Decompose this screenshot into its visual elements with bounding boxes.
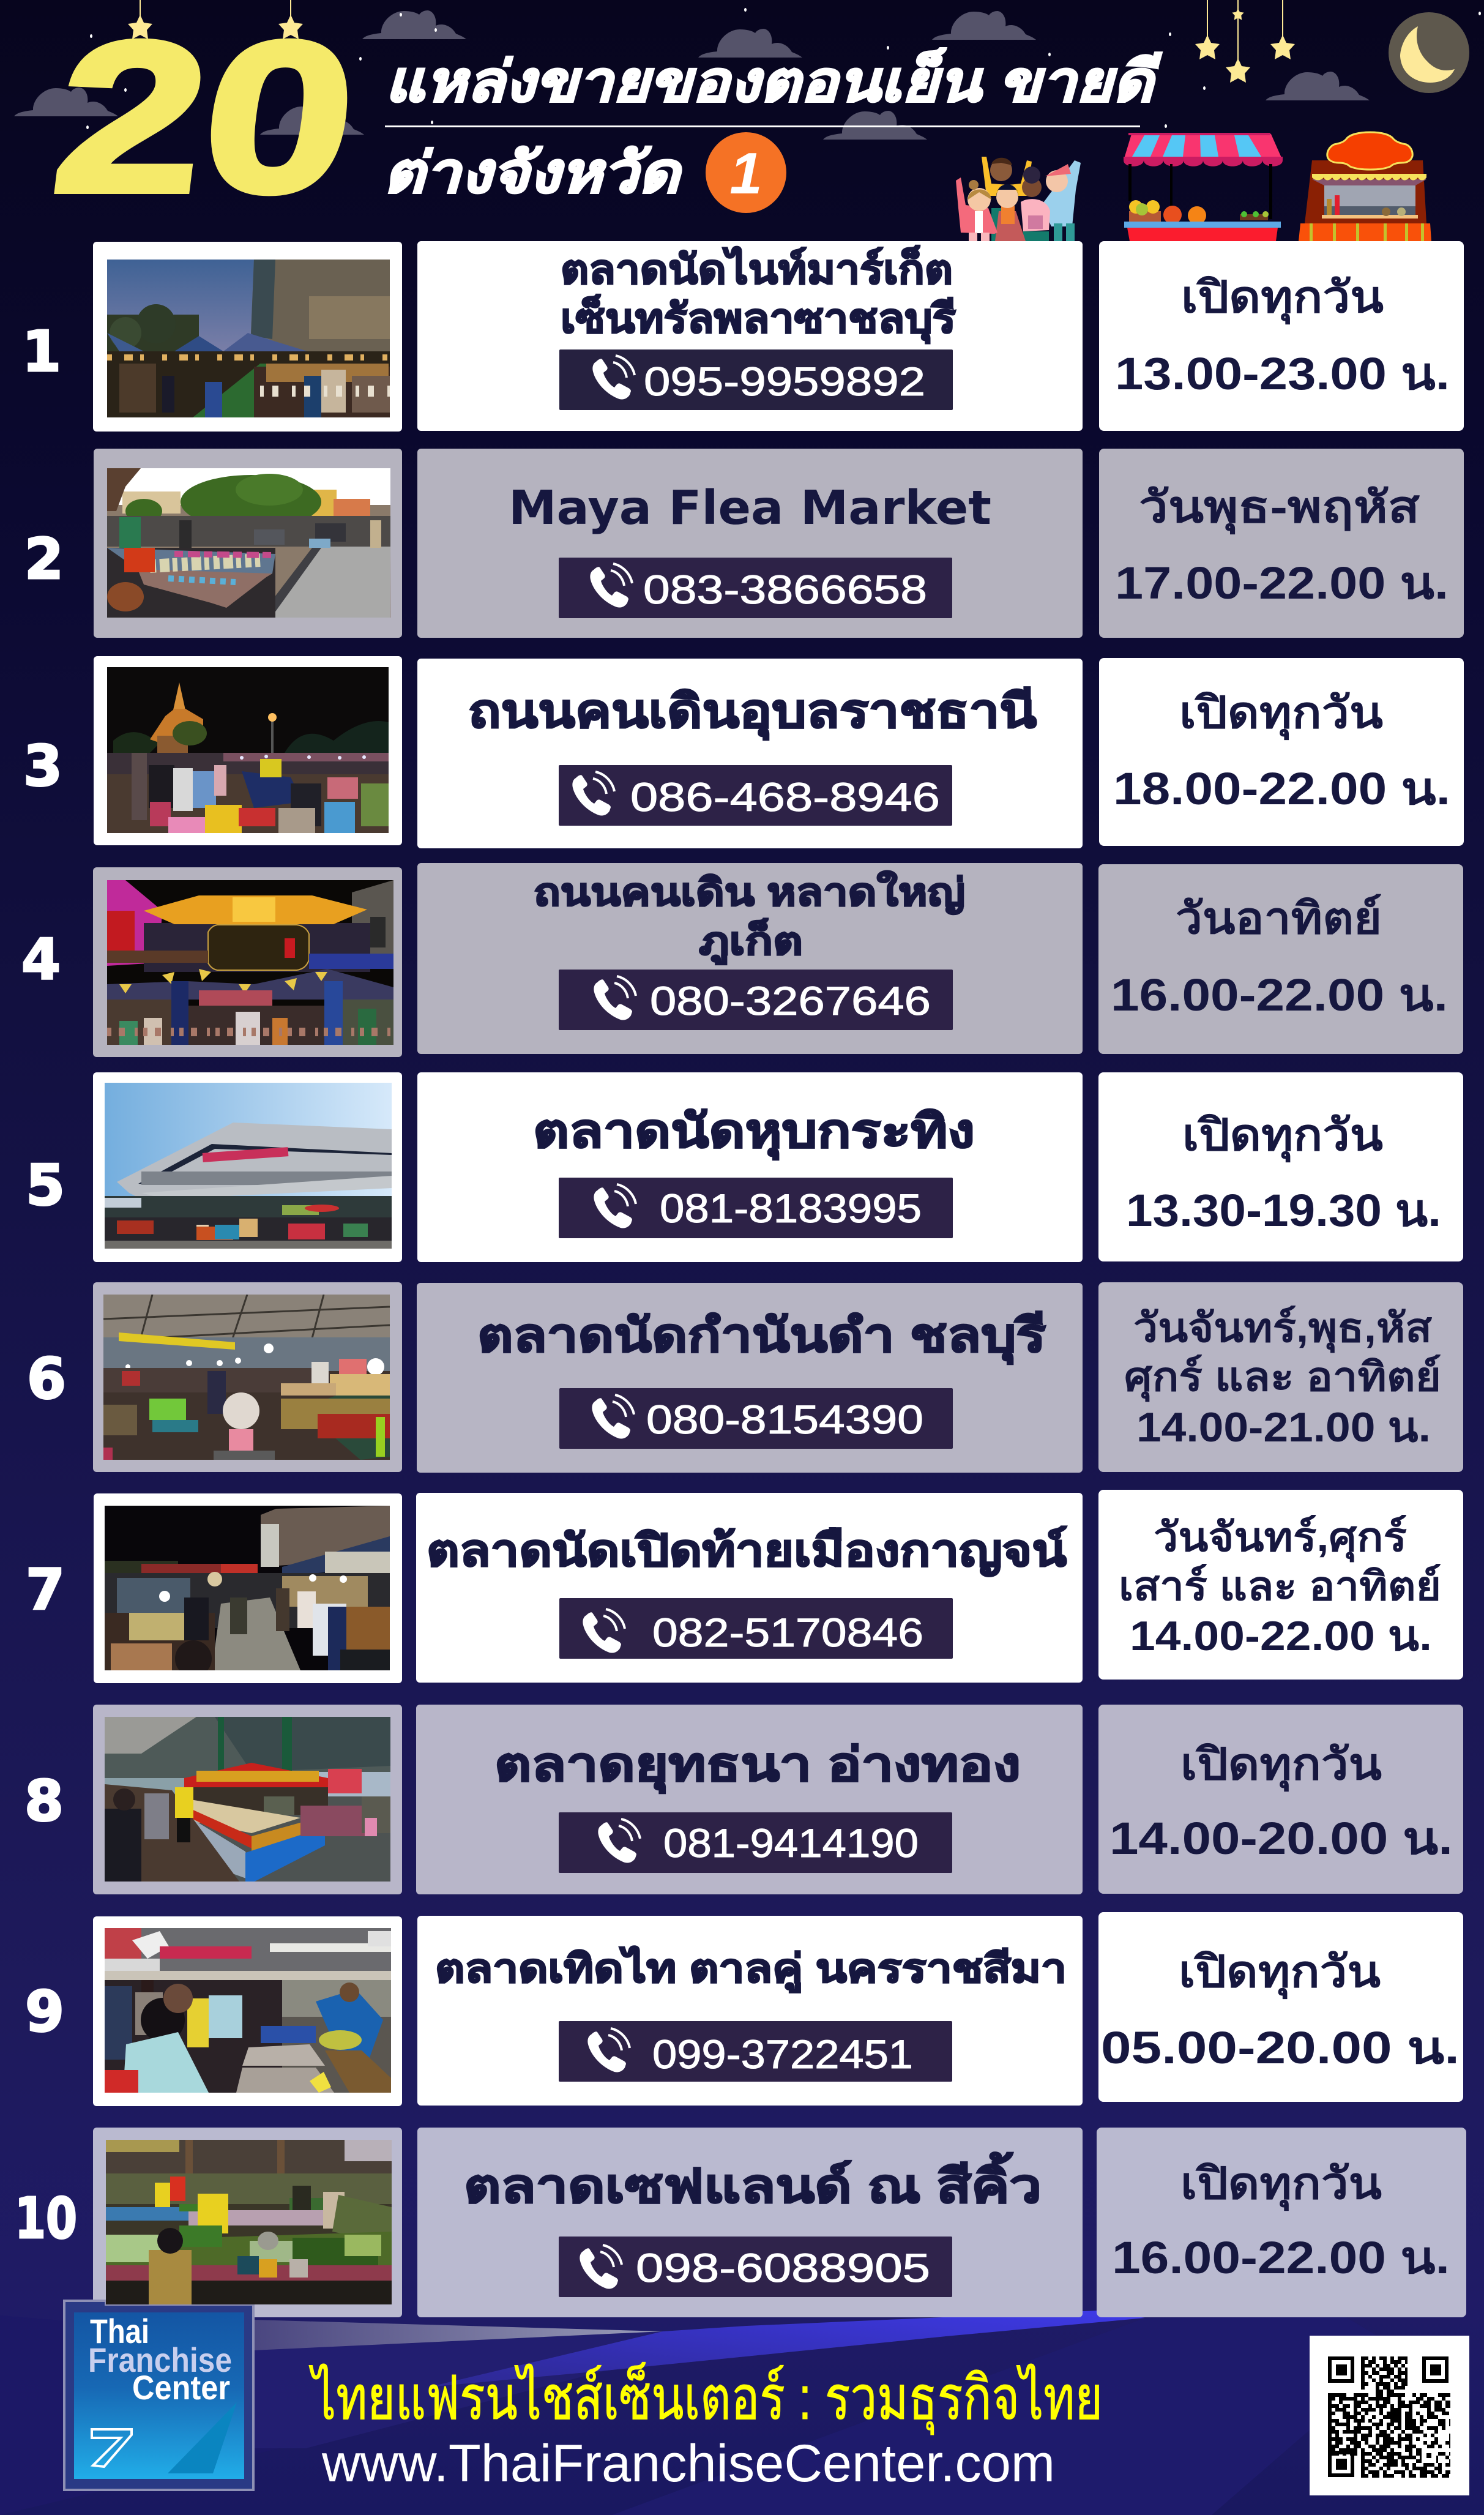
opening hours 5: เปิดทุกวัน	[1182, 1111, 1383, 1163]
name card 10	[417, 2128, 1083, 2317]
opening hours 2: วันพุธ-พฤหัส	[1139, 483, 1420, 535]
number 9: 9	[25, 1979, 64, 2044]
phone box 7	[559, 1598, 953, 1659]
time card 2	[1099, 449, 1464, 638]
row 5	[26, 1072, 1463, 1262]
row 9	[25, 1912, 1463, 2106]
market name 1: ตลาดนัดไนท์มาร์เก็ต	[561, 245, 953, 292]
market name 1	[561, 245, 956, 344]
market name 10: ตลาดเซฟแลนด์ ณ สีคิ้ว	[464, 2152, 1042, 2213]
photo card 9	[93, 1916, 402, 2106]
photo card 7	[94, 1493, 402, 1683]
number 10: 10	[15, 2186, 77, 2251]
opening hours 5: 13.30-19.30 น.	[1126, 1185, 1441, 1236]
name card 1	[417, 241, 1083, 431]
opening hours 7: 14.00-22.00 น.	[1130, 1613, 1432, 1659]
time card 3	[1099, 658, 1464, 846]
phone icon 6	[592, 1395, 634, 1439]
phone number 1: 095-9959892	[644, 359, 925, 404]
opening hours 1: เปิดทุกวัน	[1181, 273, 1384, 325]
illustration: fruit stall	[1124, 133, 1283, 241]
name card 5	[417, 1072, 1083, 1262]
phone box 10	[559, 2237, 952, 2297]
opening hours 8	[1109, 1740, 1453, 1864]
time card 8	[1098, 1705, 1463, 1894]
opening hours 8: เปิดทุกวัน	[1180, 1740, 1382, 1792]
footer website: www.ThaiFranchiseCenter.com	[321, 2434, 1055, 2493]
time card 10	[1097, 2128, 1466, 2317]
phone number 5: 081-8183995	[660, 1186, 922, 1231]
number 8: 8	[24, 1768, 64, 1834]
market name 3: ถนนคนเดินอุบลราชธานี	[468, 686, 1037, 741]
phone box 2	[559, 558, 952, 618]
time card 9	[1098, 1912, 1463, 2102]
opening hours 10: 16.00-22.00 น.	[1112, 2232, 1450, 2283]
opening hours 7: เสาร์ และ อาทิตย์	[1119, 1563, 1441, 1609]
big number 20: 20	[43, 0, 368, 237]
name card 8	[416, 1705, 1083, 1894]
phone icon 4	[594, 976, 636, 1020]
row 8	[24, 1705, 1463, 1894]
name card 6	[417, 1283, 1083, 1473]
photo card 4	[93, 867, 402, 1057]
qr code	[1310, 2336, 1469, 2495]
phone number 6: 080-8154390	[646, 1397, 923, 1442]
phone box 8	[559, 1812, 952, 1873]
photo card 5	[93, 1072, 402, 1262]
opening hours 1: 13.00-23.00 น.	[1115, 348, 1450, 399]
phone number 9: 099-3722451	[652, 2031, 913, 2077]
number 4: 4	[21, 927, 61, 992]
row 1	[22, 241, 1464, 432]
row 7	[26, 1490, 1463, 1683]
opening hours 6: วันจันทร์,พุธ,หัส	[1133, 1305, 1433, 1353]
logo: thai franchise center: Thai	[90, 2312, 149, 2350]
time card 6	[1098, 1282, 1463, 1472]
opening hours 4	[1111, 894, 1448, 1020]
logo: thai franchise center: Franchise	[88, 2341, 232, 2379]
phone icon 1	[592, 356, 635, 400]
phone box 1	[559, 349, 953, 410]
photo card 3	[94, 656, 402, 845]
number 7: 7	[26, 1557, 65, 1623]
market name 6: ตลาดนัดกำนันดำ ชลบุรี	[477, 1310, 1046, 1365]
phone number 7: 082-5170846	[652, 1610, 923, 1655]
time card 4	[1098, 864, 1463, 1054]
orange badge 1: 1	[729, 141, 763, 206]
market name 9: ตลาดเทิดไท ตาลคู่ นครราชสีมา	[435, 1946, 1067, 1993]
market name 1: เซ็นทรัลพลาซาชลบุรี	[561, 294, 956, 344]
title divider	[385, 125, 1140, 127]
number 6: 6	[27, 1346, 66, 1411]
photo 3: ubon walking street	[107, 667, 389, 833]
phone number 4: 080-3267646	[650, 978, 931, 1023]
name card 2	[417, 449, 1083, 638]
opening hours 3: 18.00-22.00 น.	[1113, 763, 1450, 814]
photo 5: hub kra thing market	[105, 1083, 392, 1249]
photo 10: safeland sikhio	[106, 2140, 392, 2304]
hanging stars left	[128, 0, 303, 39]
opening hours 7	[1119, 1514, 1441, 1659]
market name 4	[534, 870, 965, 965]
number 2: 2	[24, 526, 64, 592]
opening hours 3: เปิดทุกวัน	[1179, 689, 1383, 741]
market name 8: ตลาดยุทธนา อ่างทอง	[494, 1739, 1021, 1794]
illustration: people	[956, 157, 1081, 241]
row 6	[27, 1282, 1463, 1473]
photo card 8	[93, 1705, 402, 1894]
title line 1: แหล่งขายของตอนเย็น ขายดี	[385, 48, 1161, 113]
market name 2: Maya Flea Market	[509, 481, 991, 536]
phone box 6	[559, 1388, 953, 1449]
title line 2: ต่างจังหวัด	[383, 142, 683, 204]
phone box 9	[559, 2021, 952, 2082]
photo 1: central plaza night market	[107, 260, 390, 417]
photo 4: lardyai phuket	[107, 880, 393, 1045]
header clouds	[14, 10, 1370, 140]
row 3	[23, 656, 1464, 848]
phone icon 10	[580, 2245, 622, 2289]
market name 7: ตลาดนัดเปิดท้ายเมืองกาญจน์	[427, 1526, 1067, 1577]
row 2	[24, 449, 1464, 638]
logo: thai franchise center	[64, 2301, 253, 2490]
opening hours 6: ศุกร์ และ อาทิตย์	[1124, 1354, 1441, 1402]
phone icon 3	[572, 772, 614, 816]
phone box 5	[559, 1178, 953, 1238]
opening hours 4: 16.00-22.00 น.	[1111, 970, 1448, 1020]
header small stars dots	[86, 8, 1481, 129]
footer light shapes	[0, 2311, 1401, 2515]
opening hours 8: 14.00-20.00 น.	[1109, 1813, 1453, 1864]
opening hours 6: 14.00-21.00 น.	[1136, 1404, 1431, 1451]
phone number 3: 086-468-8946	[630, 774, 940, 820]
market name 4: ถนนคนเดิน หลาดใหญ่	[534, 870, 965, 914]
phone box 3	[559, 765, 952, 826]
opening hours 2: 17.00-22.00 น.	[1115, 558, 1449, 608]
illustration: food booth	[1299, 132, 1431, 241]
number 5: 5	[26, 1153, 65, 1218]
time card 1	[1099, 241, 1464, 431]
phone icon 7	[583, 1609, 625, 1653]
photo 6: kamnan dam market	[103, 1295, 390, 1460]
opening hours 10	[1112, 2159, 1450, 2283]
phone number 10: 098-6088905	[636, 2245, 930, 2290]
phone icon 2	[590, 564, 632, 608]
moon	[1389, 12, 1469, 93]
footer thai text: ไทยแฟรนไชส์เซ็นเตอร์ : รวมธุรกิจไทย	[309, 2361, 1103, 2435]
time card 5	[1098, 1072, 1463, 1261]
name card 4	[417, 863, 1083, 1054]
row 10	[15, 2128, 1466, 2317]
opening hours 5	[1126, 1111, 1441, 1236]
phone icon 8	[598, 1819, 640, 1863]
phone box 4	[559, 970, 953, 1030]
logo: thai franchise center: Center	[132, 2368, 230, 2407]
phone number 8: 081-9414190	[663, 1820, 919, 1866]
phone icon 9	[587, 2028, 630, 2072]
opening hours 6	[1124, 1305, 1441, 1451]
photo 2: maya flea market	[107, 468, 390, 618]
hanging stars right	[1195, 0, 1295, 83]
time card 7	[1098, 1490, 1463, 1680]
photo card 6	[93, 1282, 402, 1472]
phone number 2: 083-3866658	[643, 567, 927, 612]
number 3: 3	[23, 733, 62, 799]
photo card 2	[94, 449, 402, 638]
row 4	[21, 863, 1463, 1057]
number 1: 1	[22, 319, 61, 384]
opening hours 9: เปิดทุกวัน	[1179, 1948, 1381, 2000]
phone icon 5	[594, 1184, 636, 1228]
photo 8: yutthana ang thong market	[105, 1717, 390, 1882]
market name 4: ภูเก็ต	[699, 918, 803, 965]
name card 9	[417, 1916, 1083, 2106]
photo card 1	[93, 242, 402, 432]
opening hours 9	[1101, 1948, 1460, 2073]
opening hours 2	[1115, 483, 1449, 608]
photo card 10	[93, 2128, 402, 2317]
orange badge 1	[706, 132, 786, 213]
opening hours 7: วันจันทร์,ศุกร์	[1154, 1514, 1407, 1563]
opening hours 3	[1113, 689, 1450, 814]
photo 9: talat thai talkoo korat	[105, 1928, 391, 2093]
name card 7	[416, 1493, 1083, 1683]
opening hours 1	[1115, 273, 1450, 399]
opening hours 4: วันอาทิตย์	[1176, 894, 1382, 943]
photo 7: kanchanaburi night market	[105, 1506, 390, 1670]
opening hours 9: 05.00-20.00 น.	[1101, 2022, 1460, 2073]
name card 3	[417, 659, 1083, 848]
opening hours 10: เปิดทุกวัน	[1180, 2159, 1382, 2211]
market name 5: ตลาดนัดหุบกระทิง	[533, 1105, 975, 1160]
